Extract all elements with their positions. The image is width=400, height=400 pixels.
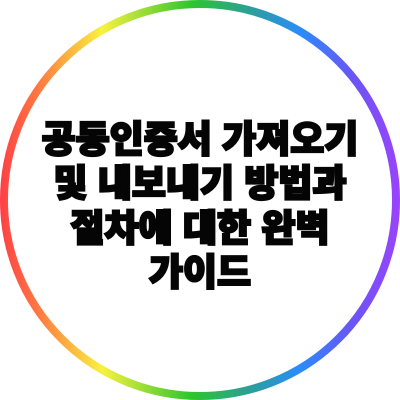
title: 절차에 대한 완벽 [70,198,330,252]
title: 가이드 [149,242,251,296]
title [42,109,358,296]
title: 및 내보내기 방법과 [53,153,347,207]
title: 공동인증서 가져오기 [42,109,358,163]
